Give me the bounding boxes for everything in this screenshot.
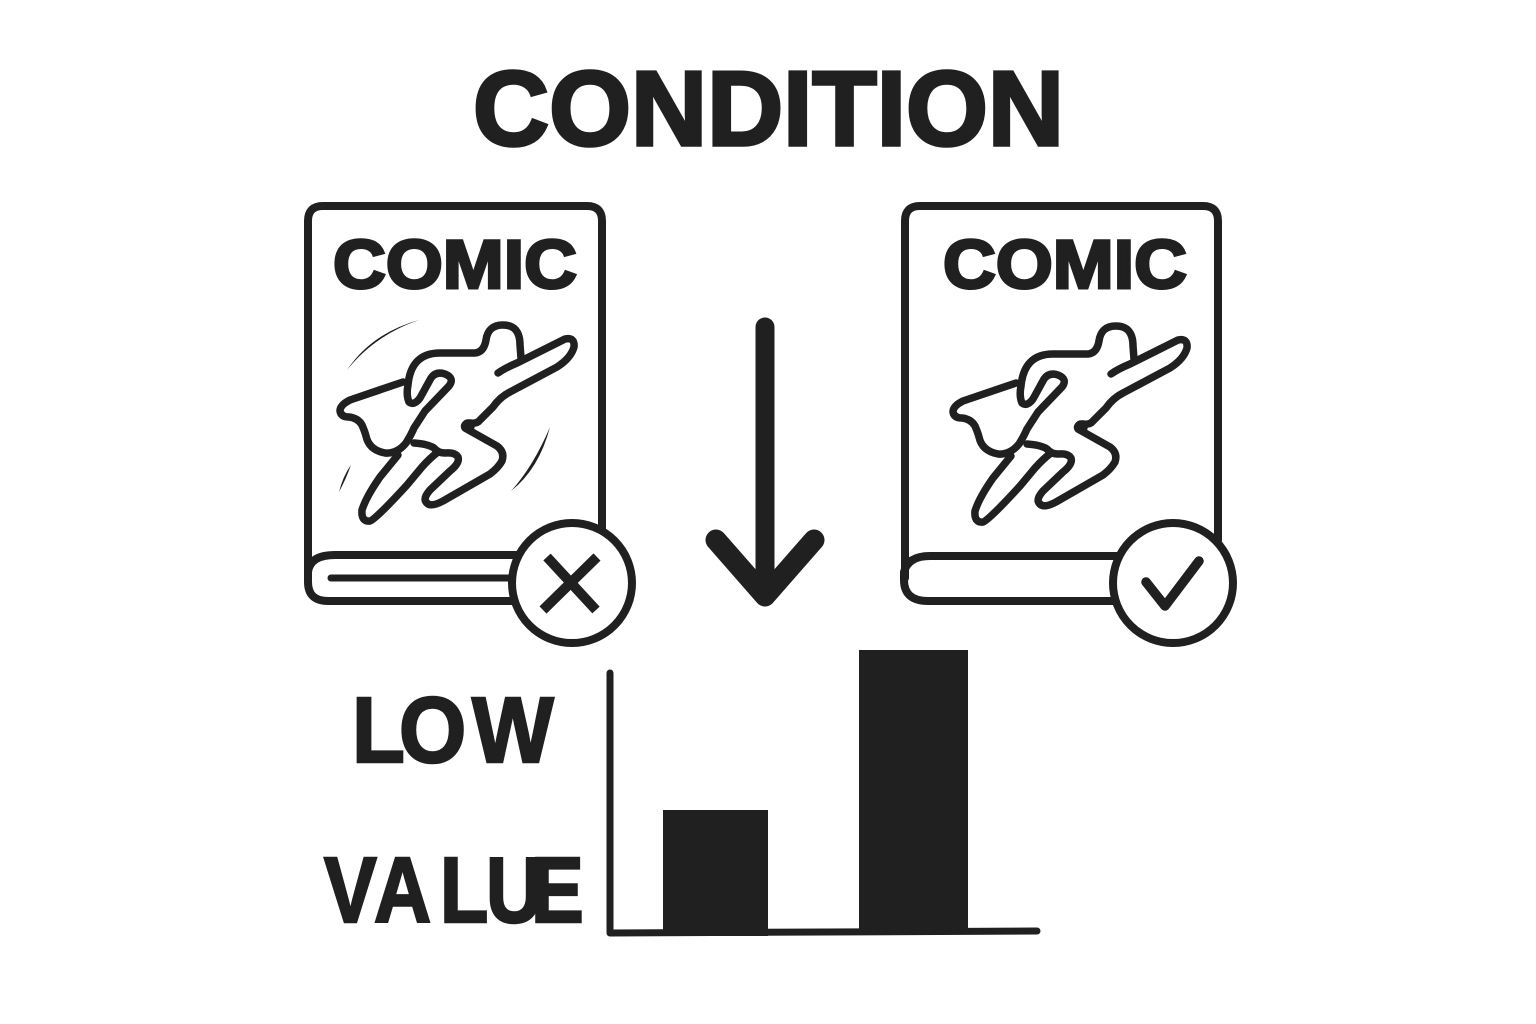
hero figure bbox=[953, 326, 1187, 522]
low value label: LOW bbox=[352, 679, 554, 783]
axes bbox=[610, 673, 1037, 933]
panel: damaged comic book bbox=[308, 206, 632, 643]
book cover outline bbox=[905, 206, 1218, 578]
badge: check mark bbox=[1113, 523, 1233, 643]
title: CONDITION bbox=[473, 50, 1064, 168]
arrow: condition affects value bbox=[716, 327, 814, 596]
panel: mint comic book bbox=[904, 206, 1233, 643]
low value label bbox=[324, 679, 584, 942]
bar: damaged value bbox=[663, 810, 768, 936]
book spine bbox=[904, 556, 1125, 601]
book spine bbox=[308, 555, 530, 601]
bar chart bbox=[610, 650, 1037, 936]
speed lines bbox=[339, 320, 550, 492]
comic label: COMIC bbox=[333, 226, 577, 303]
badge: cross bbox=[512, 523, 632, 643]
bar: mint value bbox=[859, 650, 968, 933]
book cover outline bbox=[308, 206, 602, 578]
comic label: COMIC bbox=[943, 226, 1187, 303]
hero figure bbox=[340, 325, 574, 521]
low value label: VALUE bbox=[324, 839, 584, 942]
spine crease line bbox=[331, 574, 515, 582]
